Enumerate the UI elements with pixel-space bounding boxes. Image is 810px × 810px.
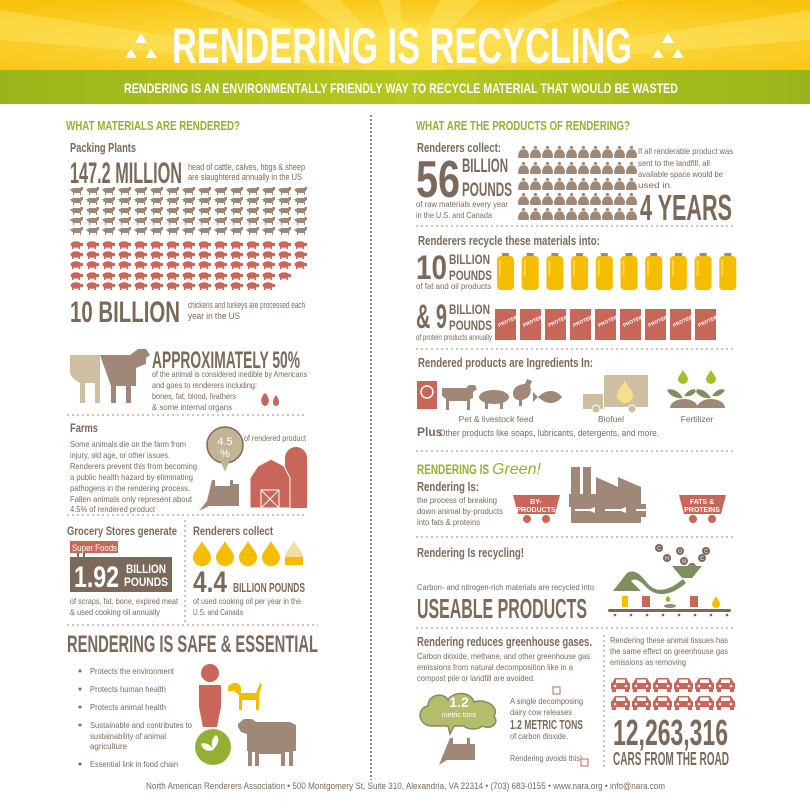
panel: renderers collect 56 billion: in the U.S. and Canada — [416, 210, 492, 220]
icon: recycling machine: C — [704, 549, 708, 555]
icon: 4.5% bubble and fallen cow: % — [220, 448, 230, 460]
panel: renderers collect 56 billion: sent to the landfill, all — [638, 158, 710, 168]
icon: half cow — [70, 349, 150, 403]
icon: cloud 1.2 metric tons: metric tons — [442, 712, 477, 719]
panel: approximately 50% — [70, 347, 307, 412]
icon: by-products cart: PRODUCTS — [516, 507, 556, 514]
header banner — [0, 0, 810, 104]
icon: recycle left — [125, 33, 157, 58]
panel: recycle into fats and proteins: POUNDS — [449, 267, 492, 283]
panel: ingredients: Pet & livestock feed — [459, 414, 534, 424]
icon: recycling machine — [608, 544, 731, 616]
panel: packing plants: 10 BILLION — [70, 296, 180, 329]
icon grid: cattle — [70, 187, 307, 235]
panel: farms: Fallen animals only represent about — [70, 494, 193, 504]
panel: cars from the road: the same effect on greenhouse gas — [610, 646, 728, 656]
panel: renderers collect cooking oil: 4.4 — [193, 566, 227, 599]
panel: greenhouse gases: A single decomposing — [510, 696, 583, 706]
panel: rendering is green: Rendering Is: — [417, 479, 479, 494]
panel: greenhouse gases — [417, 634, 592, 766]
icon: blood drops — [261, 393, 279, 406]
panel: rendering is green: the process of breaking — [417, 495, 497, 505]
panel: farms: 4.5% of rendered product — [70, 504, 156, 514]
panel: renderers collect 56 billion: BILLION — [462, 156, 508, 177]
section heading right: WHAT ARE THE PRODUCTS OF RENDERING? — [416, 118, 630, 133]
panel: cars from the road: emissions as removing — [610, 657, 686, 667]
panel: rendering is green: Green! — [492, 461, 541, 478]
bullet list — [78, 666, 192, 769]
icon: person — [199, 664, 221, 727]
panel: greenhouse gases: emissions from natural decomposition like in a — [417, 662, 573, 672]
icon: cloud 1.2 metric tons — [420, 694, 496, 765]
bullet list: Essential link in food chain — [90, 759, 178, 769]
panel: recycle into fats and proteins: Renderers recycle these materials into: — [418, 233, 600, 248]
icon: fertilizer plants — [667, 370, 725, 408]
panel: farms: a public health hazard by eliminating — [70, 472, 193, 482]
icon: leaf circle — [195, 729, 231, 765]
panel: greenhouse gases: of carbon dioxide. — [510, 731, 568, 741]
panel: cars from the road — [610, 635, 735, 769]
panel: recycle into fats and proteins: BILLION — [449, 251, 490, 267]
panel: renderers collect cooking oil: Renderers collect — [193, 524, 273, 538]
panel: renderers collect cooking oil — [193, 524, 305, 617]
icon: cloud 1.2 metric tons: 1.2 — [449, 694, 469, 710]
panel: greenhouse gases: 1.2 METRIC TONS — [510, 717, 583, 732]
panel: recycle into fats and proteins: BILLION — [449, 301, 490, 317]
icon grid: cars — [611, 678, 735, 710]
stat box: 1.92 billion pounds: 1.92 — [74, 561, 119, 594]
icon: recycling machine: C — [657, 546, 661, 552]
icon: livestock — [442, 379, 562, 410]
panel: safe & essential: RENDERING IS SAFE & ESSENTIAL — [67, 631, 318, 658]
panel: greenhouse gases: dairy cow releases — [510, 707, 572, 717]
icon grid: bags — [518, 146, 637, 220]
panel: rendering is green: RENDERING IS — [417, 461, 489, 477]
panel: packing plants: year in the US — [188, 311, 240, 321]
bullet list: Protects animal health — [90, 702, 166, 712]
icon: fats & proteins cart: PROTEINS — [684, 507, 720, 514]
icon: biofuel truck — [583, 375, 648, 413]
panel: farms: Renderers prevent this from becoming — [70, 461, 197, 471]
panel: rendering is green: down animal by-products — [417, 506, 503, 516]
panel: recycle into fats and proteins — [416, 233, 736, 342]
icon: oil drops — [193, 541, 303, 566]
icon: super foods sign: Super Foods — [72, 543, 117, 554]
bullet list: Protects human health — [90, 684, 166, 694]
panel: farms: Some animals die on the farm from — [70, 439, 186, 449]
panel: farms: of rendered product — [244, 433, 307, 443]
panel: packing plants: chickens and turkeys are processed each — [188, 300, 305, 310]
icon row: protein boxes — [495, 309, 720, 340]
panel: packing plants: head of cattle, calves, hogs & sheep — [188, 162, 305, 172]
footer: North American Renderers Association • 500 Montgomery St, Suite 310, Alexandria, VA 22314 • (703) 683-0155 • www.nara.org • info@nara.com — [146, 781, 665, 791]
panel: packing plants — [70, 140, 307, 329]
icon: factory with arrows — [569, 467, 657, 523]
stat box: 1.92 billion pounds — [70, 557, 172, 594]
panel: renderers collect 56 billion: of raw materials every year — [416, 199, 508, 209]
icon: by-products cart: BY- — [530, 499, 543, 506]
stat box: 1.92 billion pounds: BILLION — [126, 562, 166, 576]
panel: greenhouse gases: Carbon dioxide, methane, and other greenhouse gas — [417, 651, 590, 661]
panel: approximately 50%: bones, fat, blood, feathers — [152, 391, 236, 401]
panel: packing plants: 147.2 MILLION — [70, 157, 182, 190]
panel: recycle into fats and proteins: of fat and oil products — [416, 282, 491, 291]
panel: renderers collect 56 billion: 56 — [416, 151, 460, 209]
panel: greenhouse gases: Rendering reduces greenhouse gases. — [417, 634, 592, 649]
panel: renderers collect 56 billion: Renderers collect: — [417, 140, 501, 155]
panel: rendering is recycling — [417, 544, 731, 624]
panel: greenhouse gases: Rendering avoids this! — [510, 753, 582, 763]
icon: recycle right — [652, 33, 684, 58]
panel: renderers collect 56 billion: used in — [638, 180, 670, 190]
panel: ingredients: Rendered products are Ingredients In: — [418, 355, 593, 370]
bullet list: sustainability of animal — [90, 731, 166, 741]
panel: rendering is green — [417, 461, 726, 527]
icon: recycling machine: N — [690, 565, 694, 571]
icon: 4.5% bubble and fallen cow — [199, 427, 243, 511]
panel: ingredients: Fertilizer — [681, 414, 713, 424]
panel: ingredients: Biofuel — [598, 414, 624, 424]
panel: greenhouse gases: compost pile or landfill are avoided. — [417, 673, 535, 683]
bullet list: Sustainable and contributes to — [90, 720, 192, 730]
icon: dog — [228, 683, 262, 710]
icon: fats & proteins cart: FATS & — [690, 499, 714, 506]
icon: fats & proteins cart — [679, 495, 726, 523]
panel: rendering is recycling: Carbon- and nitrogen-rich materials are recycled into — [417, 582, 594, 592]
panel: cars from the road: Rendering these animal tissues has — [610, 635, 728, 645]
panel: packing plants: are slaughtered annually in the US — [188, 172, 302, 182]
panel: recycle into fats and proteins: POUNDS — [449, 317, 492, 333]
panel: cars from the road: 12,263,316 — [613, 712, 728, 753]
panel: grocery stores — [67, 524, 179, 617]
panel: recycle into fats and proteins: of protein products annually — [416, 333, 492, 342]
panel: farms: pathogens in the rendering process. — [70, 483, 190, 493]
panel: packing plants: Packing Plants — [70, 140, 136, 155]
panel: farms — [70, 421, 307, 514]
bullet list: agriculture — [90, 741, 127, 751]
icon: recycling machine: H — [665, 556, 669, 562]
panel: recycle into fats and proteins: & 9 — [416, 298, 447, 336]
icon: dog food — [417, 381, 437, 409]
panel: renderers collect cooking oil: BILLION POUNDS — [233, 580, 305, 595]
icon: recycling machine: N — [682, 559, 686, 565]
panel: renderers collect cooking oil: U.S. and Canada — [193, 607, 243, 617]
panel: approximately 50%: & some internal organs — [152, 402, 232, 412]
panel: renderers collect 56 billion: 4 YEARS — [640, 187, 732, 228]
bullet list: Protects the environment — [90, 666, 175, 676]
panel: rendering is recycling: Rendering Is recycling! — [417, 545, 524, 560]
stat box: 1.92 billion pounds: POUNDS — [124, 575, 168, 589]
panel: grocery stores: of scraps, fat, bone, expired meat — [70, 596, 179, 606]
panel: approximately 50%: and goes to renderers including: — [152, 380, 257, 390]
panel: ingredients: Plus — [417, 425, 443, 439]
icon: recycling machine: O — [678, 549, 682, 555]
icon row: oil jugs — [497, 253, 736, 290]
panel: rendering is recycling: USEABLE PRODUCTS — [417, 593, 587, 624]
panel: renderers collect 56 billion: If all renderable product was — [638, 146, 733, 156]
panel: approximately 50%: of the animal is considered inedible by Americans — [152, 369, 307, 379]
panel: approximately 50%: APPROXIMATELY 50% — [152, 347, 300, 374]
icon: cow — [238, 719, 296, 766]
panel: ingredients: Other products like soaps, lubricants, detergents, and more. — [439, 428, 659, 438]
panel: renderers collect 56 billion — [416, 140, 733, 228]
panel: farms: Farms — [70, 421, 98, 435]
panel: grocery stores: & used cooking oil annually — [70, 607, 161, 617]
icon: recycling machine: C — [700, 556, 704, 562]
panel: safe & essential — [67, 631, 318, 769]
icon grid: hogs — [70, 241, 307, 290]
panel: ingredients — [417, 355, 725, 439]
panel: farms: injury, old age, or other issues. — [70, 450, 170, 460]
panel: renderers collect 56 billion: POUNDS — [462, 180, 512, 201]
panel: rendering is green: into fats & proteins — [417, 517, 480, 527]
panel: renderers collect cooking oil: of used cooking oil per year in the — [193, 596, 301, 606]
icon: by-products cart — [513, 495, 560, 523]
panel: renderers collect 56 billion: available space would be — [638, 169, 723, 179]
section heading left: WHAT MATERIALS ARE RENDERED? — [66, 118, 240, 133]
icon: 4.5% bubble and fallen cow: 4.5 — [217, 436, 233, 448]
panel: grocery stores: Grocery Stores generate — [67, 524, 177, 538]
icon: barn — [250, 447, 307, 508]
panel: recycle into fats and proteins: 10 — [416, 249, 447, 287]
